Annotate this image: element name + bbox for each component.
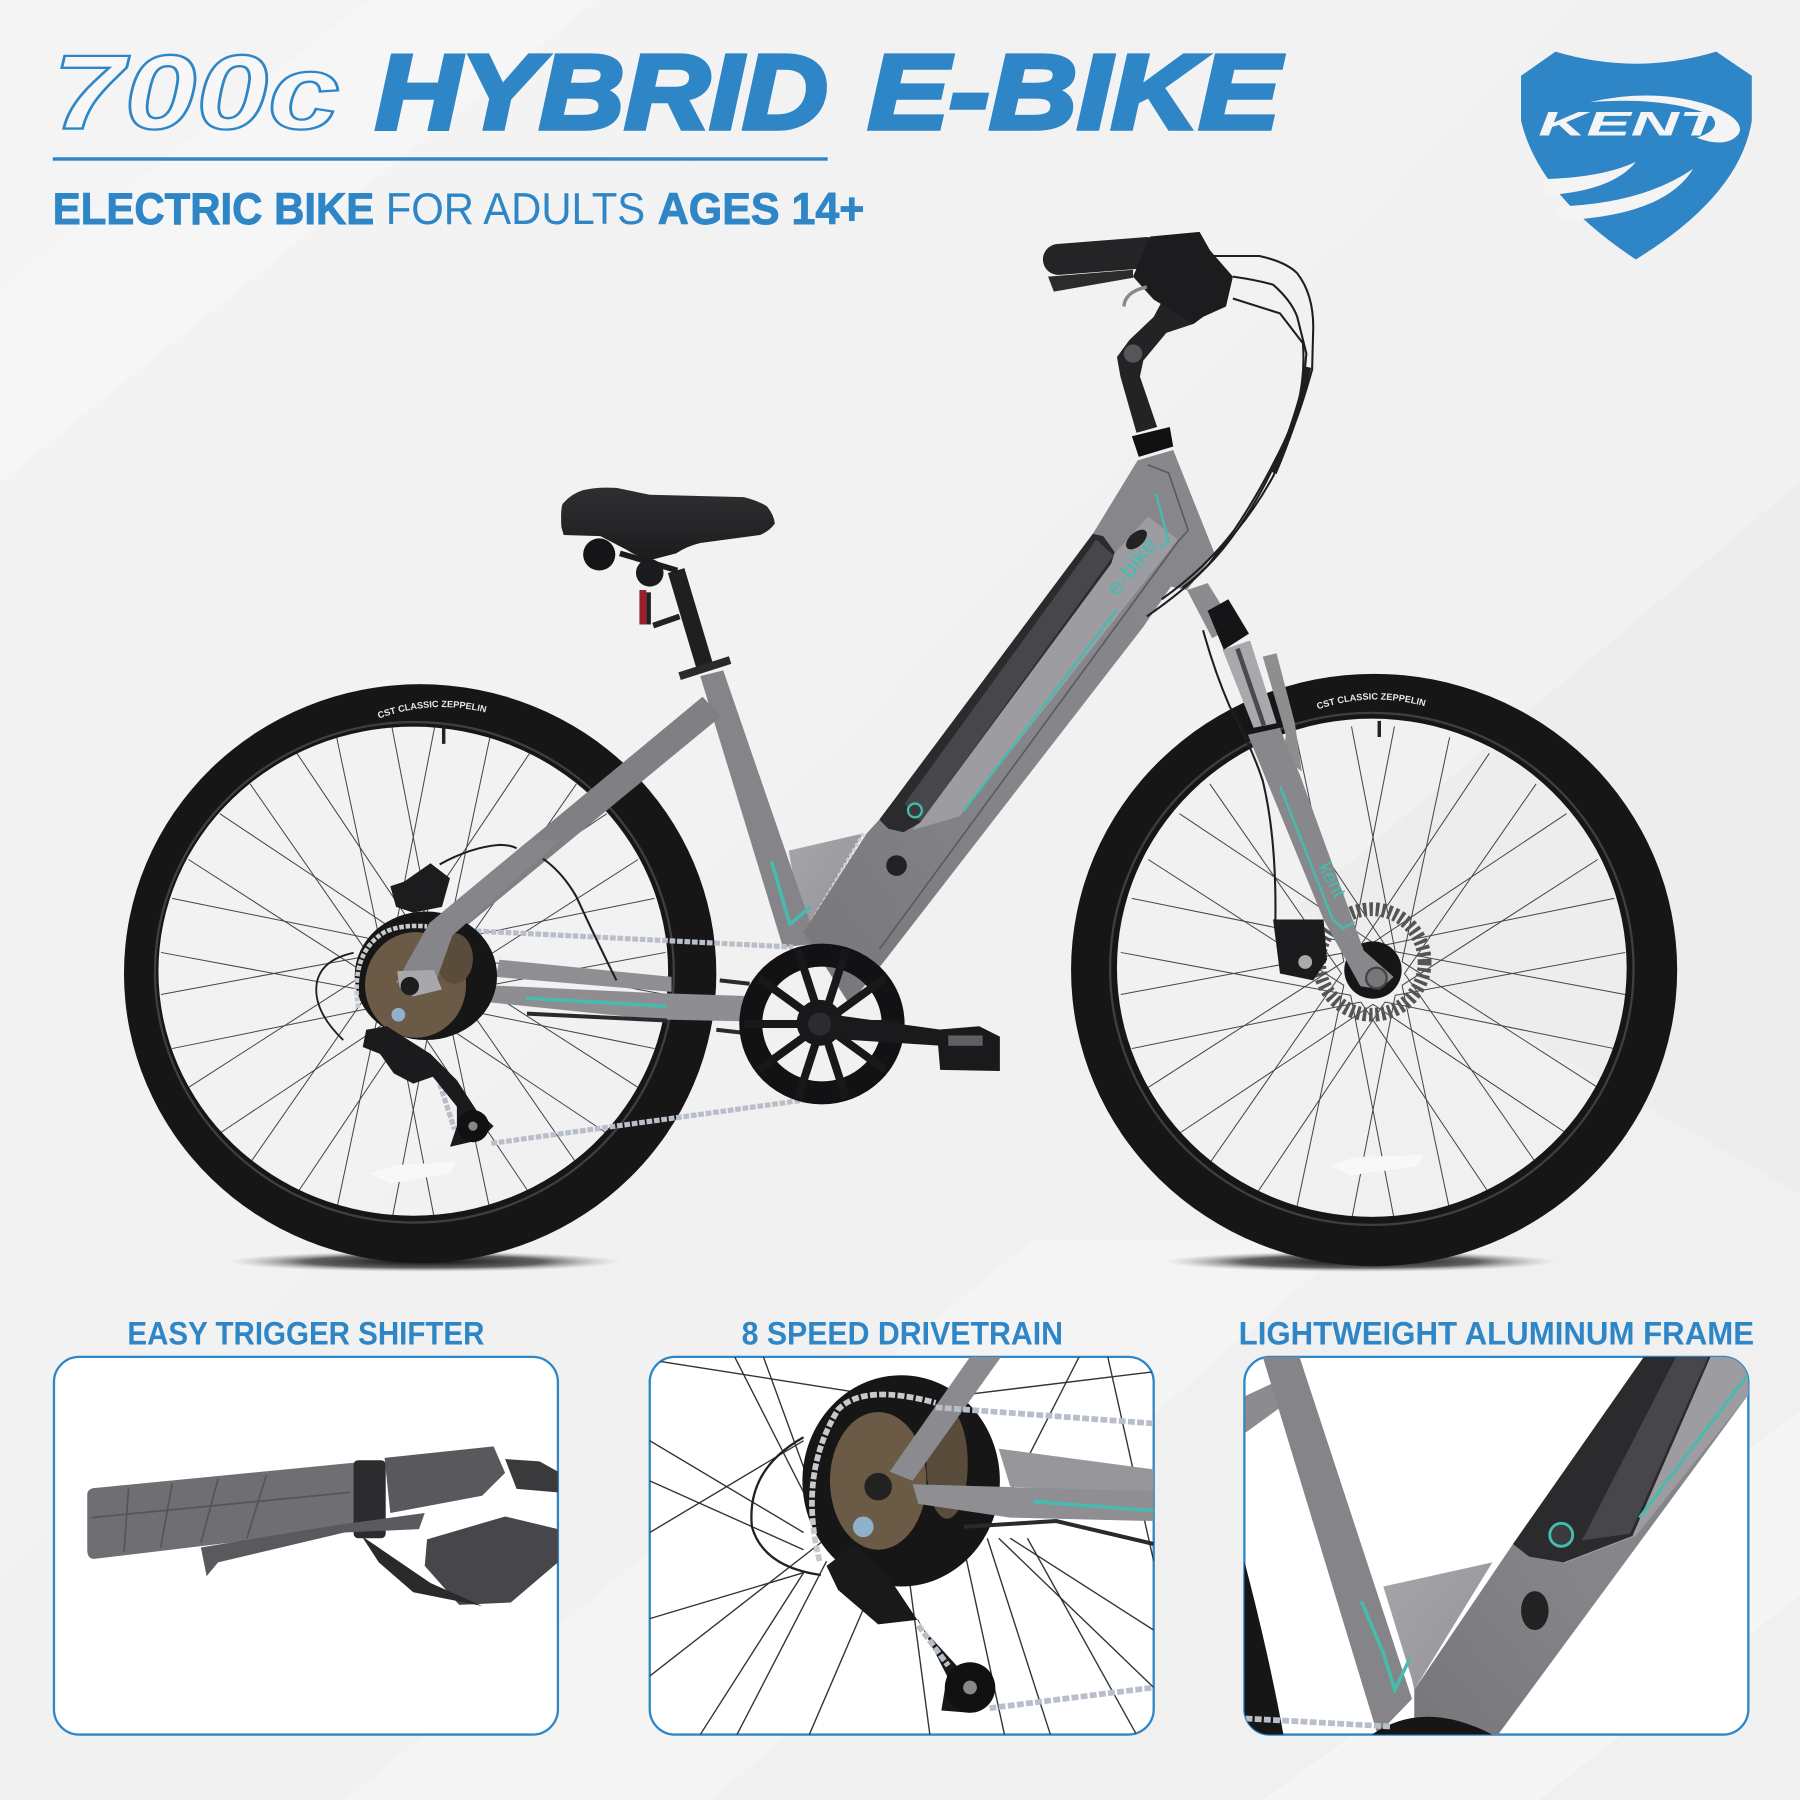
rear brake caliper and cables <box>316 845 616 1040</box>
gusset <box>789 833 863 936</box>
frame ports <box>886 526 1150 876</box>
pedal <box>937 1026 1000 1071</box>
saddle <box>561 488 775 560</box>
title <box>53 34 1284 152</box>
rear derailleur <box>363 1026 494 1147</box>
battery pack <box>879 534 1115 832</box>
seat tube <box>700 670 817 947</box>
rear cassette <box>355 840 560 1040</box>
tube character lines <box>879 465 1188 949</box>
card <box>1244 1357 1748 1735</box>
photo: cassette and derailleur <box>650 1357 1154 1735</box>
seat stay <box>396 697 721 985</box>
Kent shield logo <box>1521 52 1752 259</box>
panel: easy trigger shifter <box>54 1315 558 1735</box>
rear chain stays <box>408 960 758 1033</box>
chain <box>440 930 806 1143</box>
front wheel: CST CLASSIC ZEPPELIN <box>1317 693 1426 708</box>
seat post, clamp and reflector <box>583 538 730 676</box>
control cables <box>1147 256 1313 616</box>
panel: 8 speed drivetrain <box>650 1315 1154 1735</box>
title: E-BIKE <box>868 34 1284 152</box>
ground shadows <box>227 1251 1558 1272</box>
subtitle: AGES 14+ <box>658 184 864 234</box>
photo: frame close-up <box>1244 1357 1748 1735</box>
front wheel <box>1071 674 1678 1266</box>
front brake disc <box>1319 909 1425 1015</box>
front brake caliper <box>1273 920 1327 980</box>
subtitle <box>53 184 864 234</box>
panel: lightweight aluminum frame <box>1239 1315 1754 1735</box>
card <box>650 1357 1154 1735</box>
subtitle: FOR ADULTS <box>386 184 645 234</box>
title underline <box>53 157 828 161</box>
teal stripes and e-bike mark <box>771 494 1169 924</box>
Kent shield logo: KENT <box>1538 105 1725 143</box>
subtitle: ELECTRIC BIKE <box>53 184 374 234</box>
rear wheel <box>124 684 716 1262</box>
heading: 8 SPEED DRIVETRAIN <box>742 1315 1063 1351</box>
chainring and crank <box>744 950 941 1098</box>
heading: EASY TRIGGER SHIFTER <box>127 1315 484 1351</box>
rear wheel: CST CLASSIC ZEPPELIN <box>378 700 486 718</box>
card <box>54 1357 558 1735</box>
teal stripes and e-bike mark: e-bike <box>1101 532 1162 600</box>
stem and headset <box>1117 300 1194 457</box>
fork: kent <box>1313 859 1350 902</box>
handlebar, grip and controls <box>1048 232 1233 324</box>
fork <box>1187 583 1394 990</box>
main down tube <box>804 450 1215 1004</box>
title: 700c <box>53 34 340 152</box>
bicycle <box>124 232 1678 1272</box>
photo: grip and shifter <box>87 1446 558 1606</box>
title: HYBRID <box>375 34 828 152</box>
tube light panel <box>913 517 1178 830</box>
heading: LIGHTWEIGHT ALUMINUM FRAME <box>1239 1315 1754 1351</box>
